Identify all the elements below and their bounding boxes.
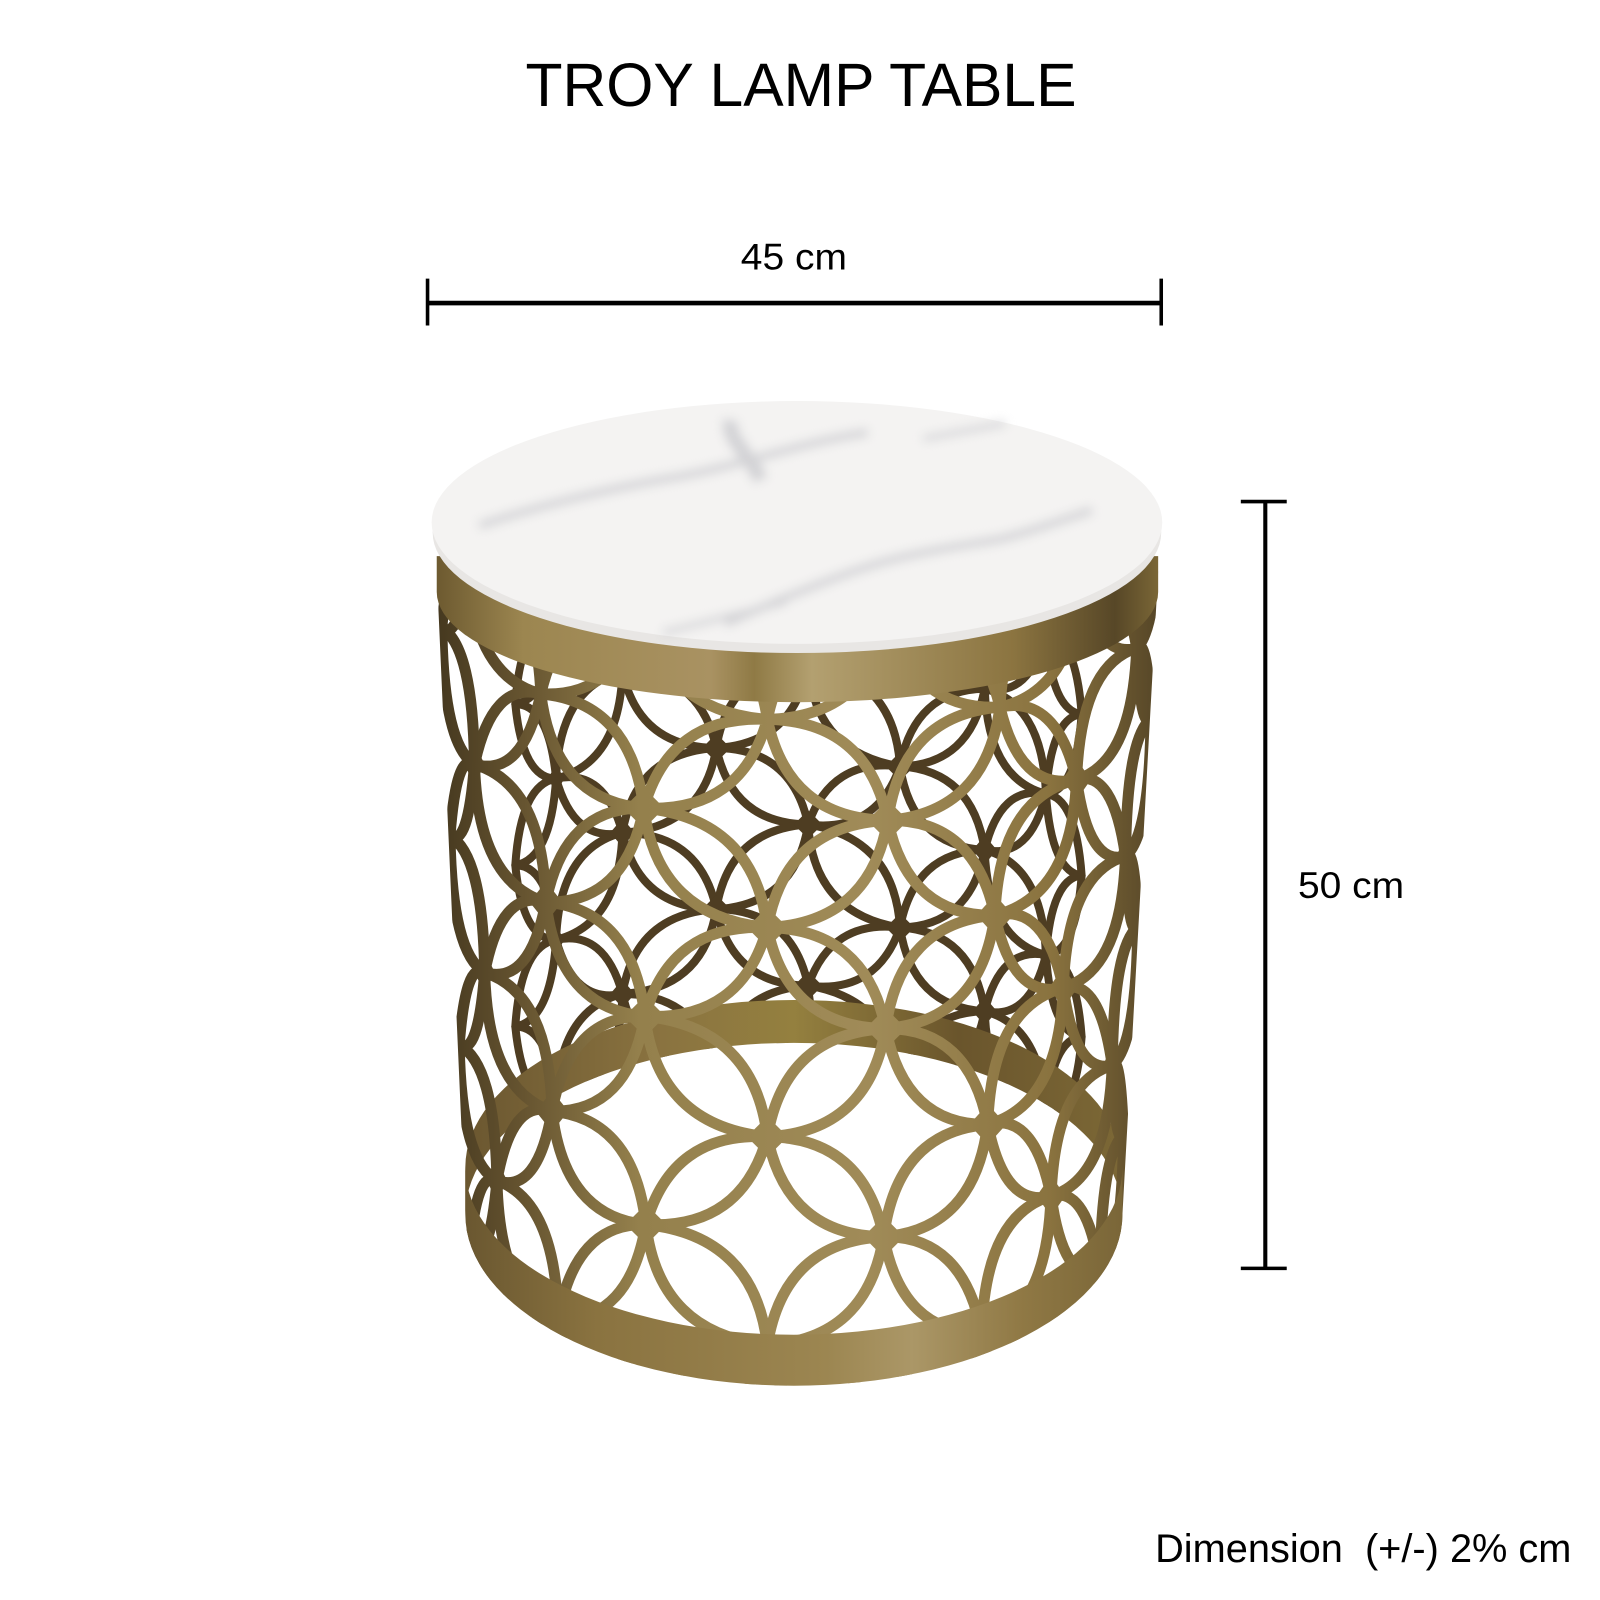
height dimension line [1241, 501, 1287, 1268]
bottom ring: front band [465, 1167, 1122, 1386]
title: TROY LAMP TABLE [526, 51, 1077, 119]
top gold band [437, 556, 1158, 702]
bottom ring: back inner surface [465, 1000, 1122, 1214]
height dimension label: 50 cm [1298, 865, 1404, 906]
front lattice: overlapping circle petals [429, 551, 1163, 1429]
back wall lattice seen through the front [511, 661, 1086, 1114]
width dimension label: 45 cm [741, 236, 847, 277]
table: lamp table product illustration [429, 401, 1163, 1429]
marble top [432, 401, 1162, 653]
dimension tolerance note: Dimension (+/-) 2% cm [1155, 1527, 1571, 1571]
width dimension line [428, 279, 1161, 326]
